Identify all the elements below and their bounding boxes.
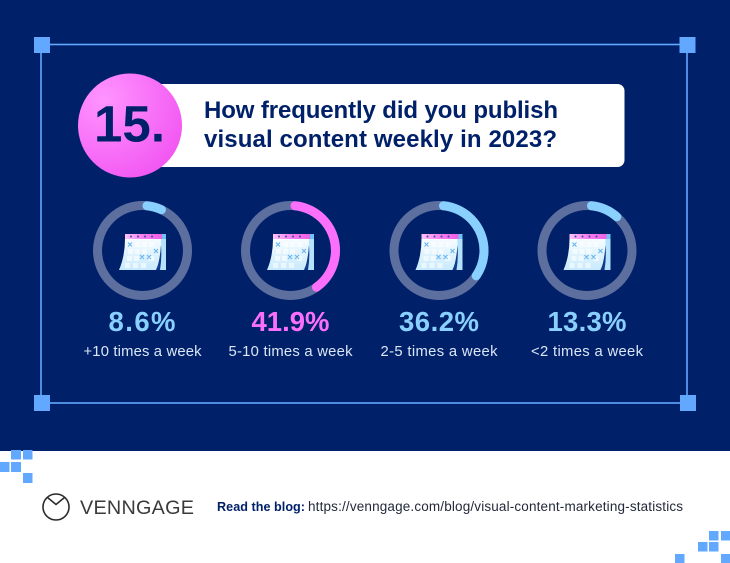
stat: 36.2% bbox=[380, 201, 498, 360]
pixel decoration: bottom left bbox=[0, 450, 32, 483]
stat: 13.3%: <2 times a week bbox=[531, 344, 644, 360]
stat: 41.9%: 41.9% bbox=[252, 306, 330, 337]
icon: venngage logo bbox=[43, 494, 69, 520]
frame bbox=[34, 37, 696, 411]
stat: 8.6%: +10 times a week bbox=[84, 344, 202, 360]
stat: 36.2%: 2-5 times a week bbox=[380, 344, 498, 360]
pixel decoration: bottom right bbox=[675, 531, 730, 563]
number badge bbox=[78, 74, 182, 178]
number badge: 15. bbox=[94, 96, 165, 152]
stat: 13.3% bbox=[531, 201, 644, 360]
stat: 36.2%: 36.2% bbox=[399, 306, 479, 337]
question title: How frequently did you publish bbox=[204, 97, 558, 124]
blog link: https://venngage.com/blog/visual-content-marketing-statistics bbox=[308, 499, 683, 514]
title banner bbox=[130, 84, 624, 167]
question title: visual content weekly in 2023? bbox=[204, 126, 557, 153]
blog link: Read the blog: bbox=[217, 500, 305, 514]
stat: 8.6%: 8.6% bbox=[108, 306, 176, 337]
stat: 8.6% bbox=[84, 201, 202, 360]
stat: 41.9% bbox=[228, 201, 353, 360]
stat: 13.3%: 13.3% bbox=[548, 306, 626, 337]
stat: 41.9%: 5-10 times a week bbox=[228, 344, 353, 360]
venngage wordmark: VENNGAGE bbox=[80, 497, 194, 519]
